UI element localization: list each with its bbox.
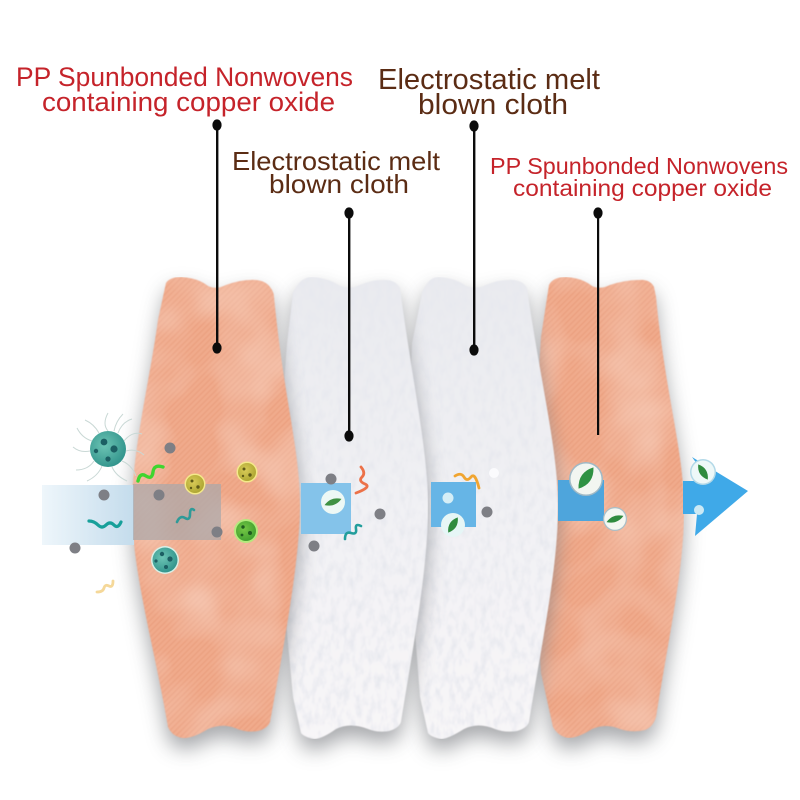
label: first layer: containing copper oxide xyxy=(42,87,335,117)
label: fourth layer xyxy=(490,153,788,201)
band: air through second melt blown layer xyxy=(431,482,476,527)
icon: leaf bubble on melt blown layer xyxy=(321,490,345,514)
icon: white particle xyxy=(489,468,499,478)
label: third layer: Electrostatic melt xyxy=(378,64,600,96)
label: third layer xyxy=(378,64,600,121)
leader line: fourth layer xyxy=(593,207,603,435)
icon: teal wave xyxy=(89,521,121,527)
icon: green germ xyxy=(234,519,258,543)
icon: green squiggle xyxy=(138,466,163,481)
icon: yellow germ 1 xyxy=(184,474,206,494)
label: first layer xyxy=(16,62,353,117)
icon: orange squiggle on second melt blown layer xyxy=(455,474,479,488)
leader line: first layer xyxy=(212,119,222,354)
icon: pale squiggle xyxy=(97,581,113,592)
band: air through outer layer xyxy=(133,484,221,540)
leader line: third layer xyxy=(469,120,479,356)
icon: teal squiggle on melt blown layer xyxy=(345,525,361,539)
icon: pale particle on arrow xyxy=(694,505,704,515)
label: third layer: blown cloth xyxy=(418,89,568,121)
icon: leaf bubble on second melt blown layer xyxy=(441,513,465,537)
label: fourth layer: PP Spunbonded Nonwovens xyxy=(490,153,788,179)
icon: teal squiggle on outer layer xyxy=(177,509,194,522)
leader line: second layer xyxy=(344,207,354,442)
gray particles xyxy=(70,442,492,554)
panel: outer layer right xyxy=(530,277,684,749)
label: second layer: blown cloth xyxy=(269,169,409,199)
label: first layer: PP Spunbonded Nonwovens xyxy=(16,62,353,92)
icon: large germ with tendrils xyxy=(73,413,144,481)
icon: large leaf bubble xyxy=(569,462,603,496)
band: air through first melt blown layer xyxy=(301,483,351,534)
icon: orange squiggle on melt blown layer xyxy=(356,467,367,493)
icon: yellow germ 2 xyxy=(236,462,258,482)
panel: outer layer left xyxy=(132,277,300,749)
label: second layer xyxy=(232,146,441,199)
icon: light blue particle xyxy=(442,492,454,504)
arrow: clean air output xyxy=(683,457,748,536)
label: second layer: Electrostatic melt xyxy=(232,146,441,176)
band: incoming air, faded left part xyxy=(42,485,134,545)
panel: melt blown layer left xyxy=(275,277,428,750)
icon: small leaf bubble xyxy=(603,507,627,531)
label: fourth layer: containing copper oxide xyxy=(513,175,772,201)
band: air through inner layer xyxy=(558,480,604,521)
panel: melt blown layer right xyxy=(405,277,558,750)
icon: teal germ xyxy=(151,546,179,574)
icon: leaf bubble on arrow xyxy=(690,459,716,485)
